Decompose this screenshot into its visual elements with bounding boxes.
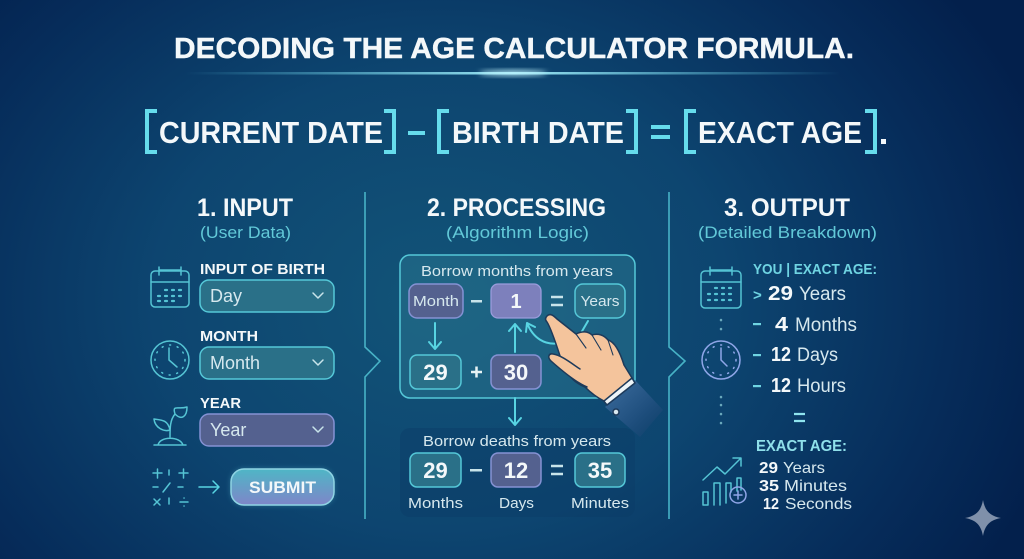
box: 29 months: 29 [423, 458, 448, 483]
box: years: Years [580, 293, 620, 310]
heading: output: 3. OUTPUT [724, 194, 850, 222]
result: years: Years [783, 460, 825, 477]
result: minutes [759, 478, 847, 495]
label: month: MONTH [200, 328, 258, 345]
arrow: curved [526, 321, 588, 344]
formula: CURRENT DATE [159, 115, 383, 150]
box: 29 [410, 355, 461, 389]
box: 12 days [491, 453, 541, 487]
dropdown: day [200, 280, 334, 312]
dots upper [720, 320, 722, 329]
label: months: Months [408, 495, 463, 512]
icon: calendar [151, 267, 189, 307]
icon: pointing hand [546, 315, 663, 437]
heading: input: 1. INPUT [197, 194, 293, 222]
heading: processing: 2. PROCESSING [427, 194, 606, 222]
dropdown: year [200, 414, 334, 446]
equals sign [794, 414, 805, 421]
arrow: down to second row [509, 398, 521, 425]
icon: clock [702, 341, 740, 379]
box: years [575, 284, 625, 318]
icon: sparkle [965, 500, 1001, 536]
arrow: month down [429, 323, 441, 349]
result: seconds [763, 496, 852, 513]
result: minutes: Minutes [784, 478, 847, 495]
row: months [753, 314, 857, 336]
row: years: Years [799, 284, 846, 305]
box: 35 minutes: 35 [588, 458, 612, 483]
result: minutes: 35 [759, 478, 779, 495]
borrow panel [400, 255, 635, 398]
icon: sprout [154, 407, 187, 445]
result: seconds: 12 [763, 496, 779, 513]
row: years [753, 283, 846, 305]
icon: growth chart [703, 458, 746, 505]
subheading: user data: (User Data) [200, 223, 291, 242]
row: hours: 12 [771, 375, 791, 397]
box: 30: 30 [504, 360, 528, 385]
row: hours [753, 375, 846, 397]
panel: processing [400, 194, 663, 517]
box: 29 months [410, 453, 461, 487]
divider right with chevron [669, 192, 685, 519]
panel: output [698, 194, 877, 513]
box: month: Month [413, 293, 459, 310]
row: months: 4 [775, 314, 789, 336]
label: your exact age: YOU | EXACT AGE: [753, 261, 877, 278]
divider left with chevron [365, 192, 380, 519]
result: years [759, 460, 825, 477]
box: 29: 29 [423, 360, 448, 385]
title underline [186, 70, 840, 76]
icon: math symbols [153, 469, 188, 506]
row: days: 12 [771, 344, 791, 366]
box: month [409, 284, 463, 318]
row: years: 29 [768, 283, 793, 305]
result: seconds: Seconds [785, 496, 852, 513]
result: years: 29 [759, 460, 778, 477]
dropdown: month: Month [210, 353, 260, 373]
row: days: Days [797, 345, 838, 366]
box: 1: 1 [510, 291, 522, 313]
label: exact age: EXACT AGE: [756, 438, 847, 455]
dropdown: month [200, 347, 334, 379]
box: 1 [491, 284, 541, 318]
box: 30 [491, 355, 541, 389]
formula: EXACT AGE [698, 115, 862, 150]
row: years: > [753, 287, 762, 304]
formula [147, 111, 886, 152]
dropdown: day: Day [210, 286, 242, 306]
borrow caption 2: Borrow deaths from years [423, 433, 611, 450]
label: input of birth: INPUT OF BIRTH [200, 261, 325, 278]
operator plus [471, 366, 482, 378]
subheading: algorithm logic: (Algorithm Logic) [446, 223, 589, 242]
label: minutes: Minutes [571, 495, 629, 512]
arrow: up [509, 324, 521, 352]
button: submit: SUBMIT [249, 478, 317, 497]
operator minus 2 [470, 469, 482, 472]
arrow: to submit [199, 481, 219, 493]
box: 12 days: 12 [504, 458, 528, 483]
icon: calendar [701, 267, 741, 308]
title: DECODING THE AGE CALCULATOR FORMULA. [174, 33, 854, 65]
row: days [753, 344, 838, 366]
subheading: detailed breakdown: (Detailed Breakdown) [698, 223, 877, 242]
label: year: YEAR [200, 395, 241, 412]
row: months: Months [795, 315, 857, 336]
operator minus [471, 300, 482, 302]
lower panel background [400, 428, 635, 517]
dots lower [720, 397, 722, 423]
borrow caption: Borrow months from years [421, 263, 613, 280]
icon: clock [151, 341, 189, 379]
label: days: Days [499, 495, 534, 512]
panel: input [151, 194, 334, 506]
formula: BIRTH DATE [452, 115, 624, 150]
operator equals [551, 297, 563, 305]
dropdown: year: Year [210, 420, 246, 440]
row: hours: Hours [797, 376, 846, 397]
box: 35 minutes [575, 453, 625, 487]
operator equals 2 [551, 466, 563, 474]
button: submit [231, 469, 334, 505]
